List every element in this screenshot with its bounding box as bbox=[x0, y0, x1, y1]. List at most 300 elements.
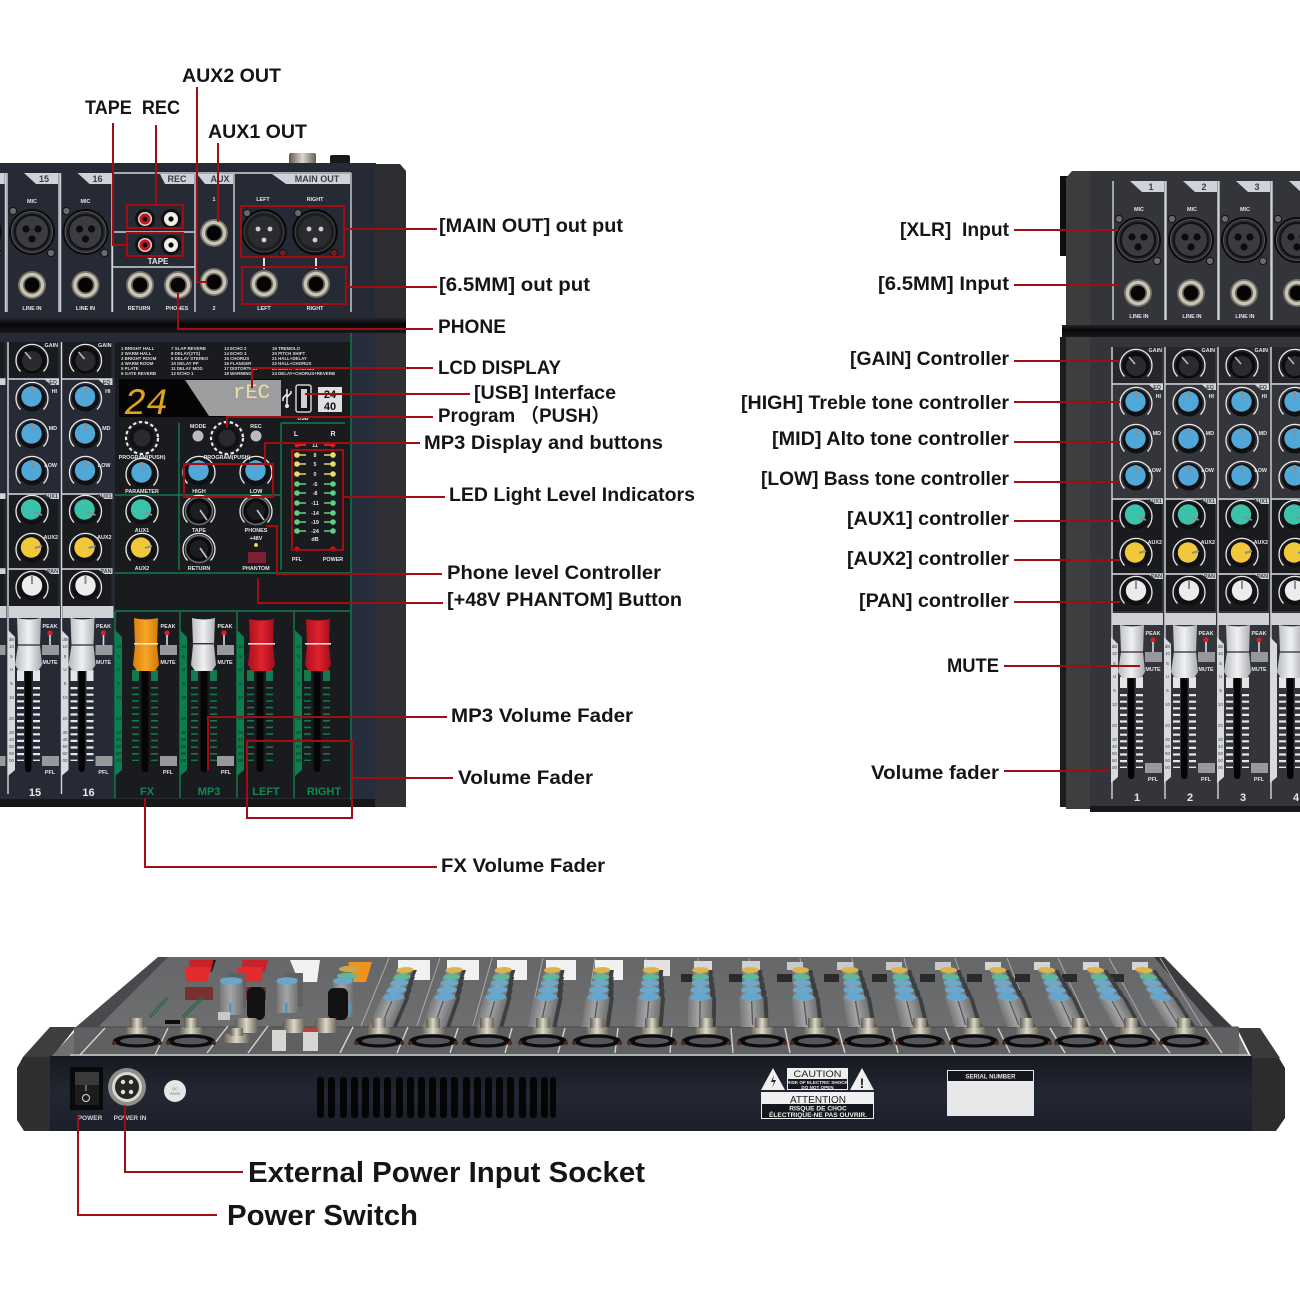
channel 2 strip: 40 bbox=[1165, 744, 1170, 749]
callout: AUX1 OUT bbox=[208, 122, 307, 222]
channel 3 strip: 5 bbox=[1219, 688, 1222, 693]
callout: high treble controller: [HIGH] Treble tone controller bbox=[741, 393, 1010, 414]
channel 16 strip: 10 bbox=[62, 695, 68, 700]
channel 2 strip: 5 bbox=[1166, 661, 1169, 666]
channel 16 strip: 00 bbox=[62, 758, 68, 763]
output jacks: REC, TAPE, RETURN, PHONES, AUX, MAIN bbox=[126, 197, 338, 312]
serial number label bbox=[947, 1070, 1034, 1116]
FX fader: U bbox=[117, 667, 120, 672]
channel 2 strip: 60 bbox=[1165, 758, 1170, 763]
channel 3 strip: 20 bbox=[1218, 723, 1223, 728]
channel 1 strip: 1 bbox=[1148, 182, 1154, 192]
effects list: 4 WARM ROOM bbox=[121, 361, 154, 366]
channel 2 strip: dB bbox=[1165, 644, 1170, 649]
panel: left mixer close-up, channels 15-16 and master section bbox=[0, 153, 406, 807]
effects list: 5 PLATE bbox=[121, 366, 139, 371]
caution label: ATTENTION bbox=[790, 1095, 846, 1106]
callout: XLR input: [XLR] Input bbox=[900, 220, 1010, 241]
upper section dividers and tabs: MAIN OUT bbox=[295, 174, 340, 184]
channel 16 strip: 16 bbox=[92, 174, 103, 184]
channel 14 edge bbox=[0, 173, 6, 794]
channel 3 strip: 50 bbox=[1218, 751, 1223, 756]
RIGHT fader: 30 bbox=[296, 730, 301, 735]
LEFT fader: 5 bbox=[239, 681, 242, 686]
effects list: 23 DELAY+CHORUS bbox=[272, 366, 314, 371]
callout: volume fader bbox=[247, 741, 594, 818]
FX fader: 50 bbox=[116, 744, 121, 749]
effects list: 8 DELAY(2TS) bbox=[171, 351, 201, 356]
callout: LED level indicators: LED Light Level Indicators bbox=[449, 485, 695, 506]
LED level meter: L bbox=[294, 431, 299, 438]
channel 16 strip: 60 bbox=[62, 751, 68, 756]
master knobs: PROGRAM(PUSH) bbox=[119, 455, 166, 461]
channel 15 strip: MIC bbox=[27, 199, 37, 205]
FX fader: 5 bbox=[117, 654, 120, 659]
FX fader: PEAK bbox=[161, 624, 176, 630]
master knobs: MODE bbox=[190, 424, 206, 430]
callout: Program push bbox=[227, 405, 610, 428]
LEFT fader bbox=[237, 619, 280, 798]
callout: AUX1 OUT: AUX1 OUT bbox=[208, 122, 307, 143]
rear output connectors bbox=[112, 1018, 337, 1051]
channel 15 strip: 5 bbox=[10, 681, 13, 686]
MP3 fader: 00 bbox=[181, 758, 186, 763]
channel 2 strip: PFL bbox=[1201, 777, 1212, 783]
output jacks: REC, TAPE, RETURN, PHONES, AUX, MAIN: 2 bbox=[212, 306, 216, 312]
channel 15 strip: GAIN bbox=[45, 343, 58, 349]
channel 1 strip: 10 bbox=[1112, 702, 1117, 707]
channel 1 strip: PEAK bbox=[1146, 631, 1161, 637]
MP3 fader: MP3 bbox=[198, 786, 220, 798]
master knobs: TAPE bbox=[192, 528, 206, 534]
master knobs: PARAMETER bbox=[125, 489, 159, 495]
channel 2 strip: 50 bbox=[1165, 751, 1170, 756]
MP3 fader: PFL bbox=[221, 770, 232, 776]
channel 15 strip: 15 bbox=[29, 787, 41, 799]
callout: 48V phantom button: [+48V PHANTOM] Button bbox=[447, 590, 682, 611]
LEFT fader: 20 bbox=[238, 716, 243, 721]
callout: PHONE: PHONE bbox=[438, 317, 506, 338]
output jacks: REC, TAPE, RETURN, PHONES, AUX, MAIN: RIGHT bbox=[307, 197, 324, 203]
channel input connectors bbox=[354, 1018, 1209, 1048]
LEFT fader: 5 bbox=[239, 654, 242, 659]
callout: external power input socket bbox=[125, 1105, 645, 1189]
master knobs: LOW bbox=[250, 489, 263, 495]
LEFT fader: U bbox=[239, 667, 242, 672]
LED level meter: -8 bbox=[313, 491, 317, 497]
callout: aux2 controller: [AUX2] controller bbox=[847, 549, 1010, 570]
master knobs: AUX2 bbox=[135, 566, 149, 572]
channel 1 strip: 50 bbox=[1112, 751, 1117, 756]
channel 3 strip: AUX1 bbox=[1254, 499, 1268, 505]
effects list: 15 CHORUS bbox=[224, 356, 249, 361]
effects list: 20 PITCH SHIFT bbox=[272, 351, 305, 356]
channel 15 strip: 50 bbox=[9, 744, 14, 749]
end caps bbox=[17, 1027, 1285, 1131]
channel 15 strip: 30 bbox=[9, 730, 14, 735]
channel 3 strip: 3 bbox=[1254, 182, 1260, 192]
upper section dividers and tabs: AUX bbox=[210, 174, 230, 184]
top surface bbox=[50, 957, 1250, 1058]
panel: rear view of the mixer bbox=[17, 957, 1285, 1131]
channel 2 strip: 10 bbox=[1165, 702, 1170, 707]
channel 1 strip: 5 bbox=[1113, 661, 1116, 666]
effects list: 12 ECHO 1 bbox=[171, 371, 194, 376]
callout: pan controller: [PAN] controller bbox=[859, 591, 1010, 612]
channel 2 strip: AUX2 bbox=[1201, 540, 1215, 546]
effects list: 13 ECHO 2 bbox=[224, 346, 247, 351]
channel 2 strip: 2 bbox=[1201, 182, 1207, 192]
serial number label: SERIAL NUMBER bbox=[966, 1074, 1016, 1080]
channel 16 strip: AUX2 bbox=[97, 535, 112, 541]
MP3 fader: 5 bbox=[182, 681, 185, 686]
FX fader: 5 bbox=[117, 681, 120, 686]
output jacks: REC, TAPE, RETURN, PHONES, AUX, MAIN: PHONES bbox=[166, 306, 189, 312]
channel 3 strip: PEAK bbox=[1252, 631, 1267, 637]
channel 3 strip: MD bbox=[1259, 431, 1267, 437]
effects list: 16 FLANGER bbox=[224, 361, 252, 366]
channel 1 strip: EQ bbox=[1153, 385, 1161, 391]
MP3 fader: 50 bbox=[181, 744, 186, 749]
channel 3 strip: LOW bbox=[1254, 468, 1268, 474]
LEFT fader: 10 bbox=[238, 695, 243, 700]
master knobs: PROGRAM(PUSH) bbox=[204, 455, 251, 461]
channel 3 strip: 10 bbox=[1218, 702, 1223, 707]
channel 16 strip: PFL bbox=[98, 770, 109, 776]
effects list: 18 WARMING bbox=[224, 371, 252, 376]
effects list bbox=[121, 346, 335, 376]
channel 15 strip: U bbox=[10, 667, 13, 672]
callout: phone level controller bbox=[266, 526, 662, 584]
channel 1 strip: HI bbox=[1156, 394, 1161, 400]
channel fader caps behind the knobs bbox=[398, 960, 1148, 982]
callout: mid alto controller: [MID] Alto tone controller bbox=[772, 429, 1010, 450]
channel 3 strip: GAIN bbox=[1255, 348, 1268, 354]
channel 1 strip: U bbox=[1113, 674, 1116, 679]
effects list: 7 SLAP REVERB bbox=[171, 346, 206, 351]
callout: power switch bbox=[78, 1115, 418, 1232]
MP3 fader: 10 bbox=[181, 644, 186, 649]
panel: right mixer close-up, channels 1-4 bbox=[1060, 171, 1300, 812]
callout: FX volume fader: FX Volume Fader bbox=[441, 856, 606, 877]
channel 2 strip: 00 bbox=[1165, 765, 1170, 770]
MP3 fader: 5 bbox=[182, 654, 185, 659]
RIGHT fader: 5 bbox=[297, 654, 300, 659]
master knobs: PHONES bbox=[245, 528, 268, 534]
LEFT fader: LEFT bbox=[252, 786, 280, 798]
callout: Program push: Program （PUSH） bbox=[438, 405, 610, 427]
channel 15 strip: HI bbox=[52, 389, 57, 395]
channel 3 strip: LINE IN bbox=[1235, 314, 1255, 320]
channel 16 strip: MUTE bbox=[96, 660, 112, 666]
channel 3 strip: 3 bbox=[1240, 792, 1246, 804]
channel 3 strip: HI bbox=[1262, 394, 1267, 400]
channel 3 strip: 30 bbox=[1218, 737, 1223, 742]
upper section dividers and tabs bbox=[112, 173, 351, 312]
QC sticker: QC bbox=[172, 1086, 178, 1091]
channel 1 strip: LINE IN bbox=[1129, 314, 1149, 320]
RIGHT fader: 20 bbox=[296, 716, 301, 721]
channel 2 strip: PEAK bbox=[1199, 631, 1214, 637]
channel 3 strip: MUTE bbox=[1251, 667, 1267, 673]
FX fader: 20 bbox=[116, 716, 121, 721]
power switch: POWER bbox=[78, 1115, 103, 1122]
channel 15 strip: PFL bbox=[45, 770, 56, 776]
channel 1 strip: MD bbox=[1153, 431, 1161, 437]
RIGHT fader: 40 bbox=[296, 737, 301, 742]
channel 2 strip: 5 bbox=[1166, 688, 1169, 693]
callout: MP3 volume fader: MP3 Volume Fader bbox=[451, 706, 634, 727]
USB socket and format badge: USB bbox=[297, 416, 309, 422]
RIGHT fader: 50 bbox=[296, 744, 301, 749]
MP3 fader: U bbox=[182, 667, 185, 672]
FX fader: 10 bbox=[116, 695, 121, 700]
effects list: 24 DELAY+CHORUS+REVERB bbox=[272, 371, 335, 376]
channel 1 strip: AUX1 bbox=[1148, 499, 1162, 505]
channel 1 strip: MUTE bbox=[1145, 667, 1161, 673]
channel 2 strip: MUTE bbox=[1198, 667, 1214, 673]
RIGHT fader bbox=[295, 619, 341, 798]
channel 1 strip: 40 bbox=[1112, 744, 1117, 749]
channel 1 strip: 60 bbox=[1112, 758, 1117, 763]
channel 16 strip: PAN bbox=[101, 569, 112, 575]
effects list: 3 BRIGHT ROOM bbox=[121, 356, 157, 361]
channel 16 strip bbox=[60, 173, 114, 799]
FX fader: 60 bbox=[116, 751, 121, 756]
output jacks: REC, TAPE, RETURN, PHONES, AUX, MAIN: LEFT bbox=[257, 306, 271, 312]
MP3 fader: 60 bbox=[181, 751, 186, 756]
callout: 6.5MM out put bbox=[242, 267, 591, 304]
channel 1 strip: PAN bbox=[1151, 574, 1162, 580]
power switch: I bbox=[85, 1084, 87, 1093]
callout: AUX2 OUT bbox=[182, 66, 281, 282]
channel 2 strip bbox=[1164, 181, 1218, 804]
power input socket: POWER IN bbox=[114, 1115, 147, 1122]
channel 4 strip, cropped: 4 bbox=[1293, 792, 1300, 804]
LEFT fader: 60 bbox=[238, 751, 243, 756]
callout: MP3 volume fader bbox=[208, 706, 634, 770]
caution label: ! bbox=[860, 1075, 864, 1091]
callout: MAIN OUT out put: [MAIN OUT] out put bbox=[439, 216, 624, 237]
master knobs bbox=[119, 422, 272, 572]
mixer body bbox=[1060, 171, 1300, 812]
channel 15 strip: 60 bbox=[9, 751, 14, 756]
effects list: 6 GATE REVERB bbox=[121, 371, 156, 376]
effects list: 1 BRIGHT HALL bbox=[121, 346, 155, 351]
callout: LCD DISPLAY: LCD DISPLAY bbox=[438, 358, 561, 379]
channel 15 strip: 40 bbox=[9, 737, 14, 742]
channel 16 strip: MIC bbox=[81, 199, 91, 205]
channel 3 strip: PFL bbox=[1254, 777, 1265, 783]
channel 15 strip: AUX1 bbox=[44, 494, 58, 500]
channel 2 strip: 20 bbox=[1165, 723, 1170, 728]
RIGHT fader: 5 bbox=[297, 681, 300, 686]
MP3 fader: 30 bbox=[181, 730, 186, 735]
callout: MAIN OUT out put bbox=[241, 206, 624, 257]
channel 16 strip: 20 bbox=[62, 716, 68, 721]
channel 16 strip: dB bbox=[62, 637, 68, 642]
channel 3 strip: dB bbox=[1218, 644, 1223, 649]
channel 1 strip bbox=[1111, 181, 1165, 804]
channel 15 strip bbox=[7, 173, 60, 799]
caution label: RISK OF ELECTRIC SHOCK bbox=[787, 1080, 849, 1085]
channel 2 strip: MD bbox=[1206, 431, 1214, 437]
MP3 fader: MUTE bbox=[217, 660, 233, 666]
effects list: 17 DISTORTION bbox=[224, 366, 257, 371]
MP3 fader: 10 bbox=[181, 695, 186, 700]
RIGHT fader: 60 bbox=[296, 751, 301, 756]
FX fader: PFL bbox=[163, 770, 174, 776]
callout: aux1 controller: [AUX1] controller bbox=[847, 509, 1010, 530]
channel 16 strip: GAIN bbox=[98, 343, 112, 349]
FX fader: 40 bbox=[116, 737, 121, 742]
channel 2 strip: 2 bbox=[1187, 792, 1193, 804]
callout: USB interface: [USB] Interface bbox=[474, 383, 616, 404]
master knobs: REC bbox=[250, 424, 262, 430]
effects list: 22 HALL+CHORUS bbox=[272, 361, 311, 366]
channel 2 strip: GAIN bbox=[1202, 348, 1215, 354]
callout: 48V phantom button bbox=[258, 578, 682, 611]
RIGHT fader: 00 bbox=[296, 758, 301, 763]
channel 16 strip: PEAK bbox=[96, 624, 111, 630]
FX fader: FX bbox=[140, 786, 155, 798]
channel 16 strip: MD bbox=[102, 426, 111, 432]
channel 3 strip: EQ bbox=[1259, 385, 1267, 391]
MP3 fader: 40 bbox=[181, 737, 186, 742]
channel 16 strip: 10 bbox=[62, 644, 68, 649]
channel 2 strip: U bbox=[1166, 674, 1169, 679]
channel 15 strip: PEAK bbox=[43, 624, 58, 630]
master section faders and knobs bbox=[150, 960, 372, 1024]
LEFT fader: 00 bbox=[238, 758, 243, 763]
channel 15 strip: MUTE bbox=[42, 660, 58, 666]
FX fader: 10 bbox=[116, 644, 121, 649]
channel 2 strip: AUX1 bbox=[1201, 499, 1215, 505]
RIGHT fader: 10 bbox=[296, 695, 301, 700]
MP3 fader: PEAK bbox=[218, 624, 233, 630]
channel 1 strip: dB bbox=[1112, 644, 1117, 649]
FX fader: 30 bbox=[116, 730, 121, 735]
effects list: 21 HALL+DELAY bbox=[272, 356, 307, 361]
master knobs: PHANTOM bbox=[242, 566, 270, 572]
channel 16 strip: LOW bbox=[98, 463, 111, 469]
channel 15 strip: dB bbox=[9, 637, 14, 642]
channel 1 strip: 20 bbox=[1112, 723, 1117, 728]
upper section dividers and tabs: REC bbox=[167, 174, 187, 184]
RIGHT fader: 10 bbox=[296, 644, 301, 649]
master knobs: RETURN bbox=[188, 566, 210, 572]
LED level meter: 11 bbox=[312, 443, 318, 449]
LED level meter: -24 bbox=[311, 529, 319, 535]
output jacks: REC, TAPE, RETURN, PHONES, AUX, MAIN: LEFT bbox=[256, 197, 270, 203]
LED display: rEC bbox=[233, 382, 270, 405]
callout: mute: MUTE bbox=[947, 656, 999, 677]
FX fader bbox=[115, 618, 177, 798]
output jacks: REC, TAPE, RETURN, PHONES, AUX, MAIN: 1 bbox=[212, 197, 216, 203]
USB socket and format badge: 40 bbox=[324, 401, 336, 413]
caution label bbox=[761, 1068, 874, 1119]
channel 15 strip: 15 bbox=[39, 174, 49, 184]
effects list: 19 TREMOLO bbox=[272, 346, 301, 351]
channel 16 strip: 30 bbox=[62, 730, 68, 735]
channel 2 strip: PAN bbox=[1204, 574, 1215, 580]
callout: TAPE REC bbox=[85, 98, 183, 256]
USB socket and format badge bbox=[283, 385, 342, 422]
MP3 fader: 20 bbox=[181, 716, 186, 721]
channel 16 strip: 40 bbox=[62, 737, 68, 742]
channel 3 strip: 40 bbox=[1218, 744, 1223, 749]
LED level meter: -14 bbox=[311, 511, 319, 517]
callout: gain controller: [GAIN] Controller bbox=[850, 349, 1010, 370]
FX fader: 00 bbox=[116, 758, 121, 763]
channel 16 strip: U bbox=[63, 667, 67, 672]
channel 15 strip: MD bbox=[49, 426, 57, 432]
channel 1 strip: 30 bbox=[1112, 737, 1117, 742]
caution label: RISQUE DE CHOC bbox=[789, 1106, 847, 1112]
channel 2 strip: EQ bbox=[1206, 385, 1214, 391]
effects list: 9 DELAY STEREO bbox=[171, 356, 209, 361]
effects list: 10 DELAY PP bbox=[171, 361, 199, 366]
mixer body bbox=[0, 163, 406, 807]
effects list: 11 DELAY MOD bbox=[171, 366, 203, 371]
channel 1 strip: MIC bbox=[1134, 207, 1144, 213]
power input socket bbox=[108, 1068, 147, 1122]
QC sticker: PASS bbox=[170, 1091, 181, 1096]
output jacks: REC, TAPE, RETURN, PHONES, AUX, MAIN: RETURN bbox=[128, 306, 150, 312]
LEFT fader: 50 bbox=[238, 744, 243, 749]
master knobs: +48V bbox=[250, 536, 263, 542]
RIGHT fader: U bbox=[297, 667, 300, 672]
caution label: ÉLECTRIQUE-NE PAS OUVRIR. bbox=[769, 1110, 867, 1119]
channel 15 strip: 10 bbox=[9, 644, 14, 649]
callout: FX volume fader bbox=[145, 798, 606, 877]
output jacks: REC, TAPE, RETURN, PHONES, AUX, MAIN: TAPE bbox=[148, 257, 169, 266]
channel 16 strip: 16 bbox=[82, 787, 95, 799]
LED level meter: -19 bbox=[311, 520, 319, 526]
LED level meter: 5 bbox=[314, 462, 316, 468]
callout: 6.5MM input: [6.5MM] Input bbox=[878, 274, 1010, 295]
LED level meter: dB bbox=[311, 537, 319, 543]
channel 1 strip: 5 bbox=[1113, 688, 1116, 693]
LEFT fader: 40 bbox=[238, 737, 243, 742]
QC sticker bbox=[164, 1080, 186, 1102]
LED level meter: -11 bbox=[311, 501, 319, 507]
LEFT fader: 30 bbox=[238, 730, 243, 735]
output jacks: REC, TAPE, RETURN, PHONES, AUX, MAIN: RIGHT bbox=[307, 306, 324, 312]
LED level meter: R bbox=[330, 431, 336, 438]
channel 1 strip: 00 bbox=[1112, 765, 1117, 770]
channel 1 strip: PFL bbox=[1148, 777, 1159, 783]
callout: low bass controller: [LOW] Bass tone controller bbox=[761, 469, 1010, 490]
callout: phone level controller: Phone level Controller bbox=[447, 563, 662, 584]
channel knob columns bbox=[369, 967, 1196, 1027]
callout: AUX2 OUT: AUX2 OUT bbox=[182, 66, 281, 87]
FX fader: MUTE bbox=[160, 660, 176, 666]
master knobs: HIGH bbox=[192, 489, 206, 495]
master knobs: AUX1 bbox=[135, 528, 149, 534]
channel 16 strip: 5 bbox=[64, 681, 67, 686]
channel 16 strip: 50 bbox=[62, 744, 68, 749]
channel 3 strip: 00 bbox=[1218, 765, 1223, 770]
callout: power switch: Power Switch bbox=[227, 1200, 418, 1232]
channel 2 strip: 10 bbox=[1165, 651, 1170, 656]
callout: 6.5MM out put: [6.5MM] out put bbox=[439, 275, 591, 296]
channel 15 strip: LINE IN bbox=[22, 306, 42, 312]
channel 16 strip: HI bbox=[105, 389, 111, 395]
LED level meter: PFL bbox=[292, 557, 303, 563]
callout: volume fader, channels: Volume fader bbox=[871, 763, 1000, 784]
channel 3 strip: AUX2 bbox=[1254, 540, 1268, 546]
